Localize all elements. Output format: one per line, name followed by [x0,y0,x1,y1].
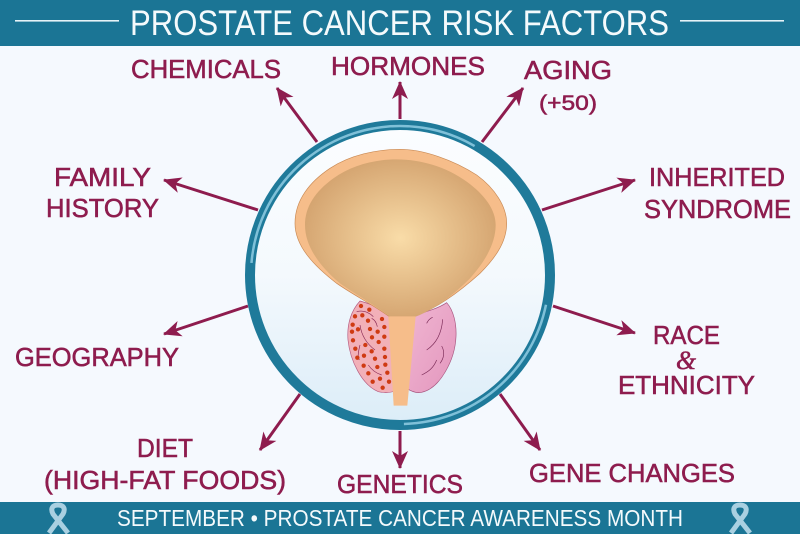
prostate lobe: healthy [407,303,456,393]
label: race and ethnicity: ETHNICITY [618,370,755,400]
arrow: inherited syndrome [542,180,635,210]
arrow: family history [164,180,258,210]
label: hormones: HORMONES [331,51,485,81]
arrow: gene changes [500,394,540,450]
label: race and ethnicity: & [676,346,697,375]
arrow: aging [482,88,523,142]
label: diet [44,433,286,495]
arrow: race and ethnicity [553,306,635,333]
label: race and ethnicity: RACE [653,320,720,350]
label: geography: GEOGRAPHY [15,342,179,372]
label: diet: DIET [137,433,193,463]
label: inherited syndrome: SYNDROME [644,194,791,224]
label: genetics: GENETICS [337,469,463,499]
label: aging: (+50) [539,92,597,115]
circle frame [250,125,550,425]
urethra [388,316,416,406]
arrow: genetics [398,431,402,468]
label: inherited syndrome: INHERITED [649,162,785,192]
label: family history: FAMILY [54,162,151,192]
arrow: chemicals [277,88,317,142]
bladder cavity [305,159,496,317]
label: chemicals: CHEMICALS [131,54,281,84]
prostate lobe: cancerous [348,301,397,393]
label: gene changes: GENE CHANGES [529,458,735,488]
arrow: diet [260,394,300,450]
arrow: hormones [398,82,402,119]
icon: awareness ribbon left [49,505,68,533]
label: aging [524,55,612,115]
label: race and ethnicity [618,320,755,400]
arrows [164,82,635,468]
arrow: geography [164,306,248,334]
label: family history [46,162,159,223]
label: inherited syndrome [644,162,791,224]
icon: awareness ribbon right [731,505,750,533]
header bar [0,0,800,46]
title: PROSTATE CANCER RISK FACTORS [130,4,669,43]
label: family history: HISTORY [46,193,159,223]
bladder outer wall [295,149,507,316]
label: diet: (HIGH-FAT FOODS) [44,465,286,495]
prostate and bladder illustration [295,149,507,406]
label: aging: AGING [524,55,612,85]
footer text: SEPTEMBER • PROSTATE CANCER AWARENESS MONTH [117,505,683,531]
footer bar [0,502,800,534]
